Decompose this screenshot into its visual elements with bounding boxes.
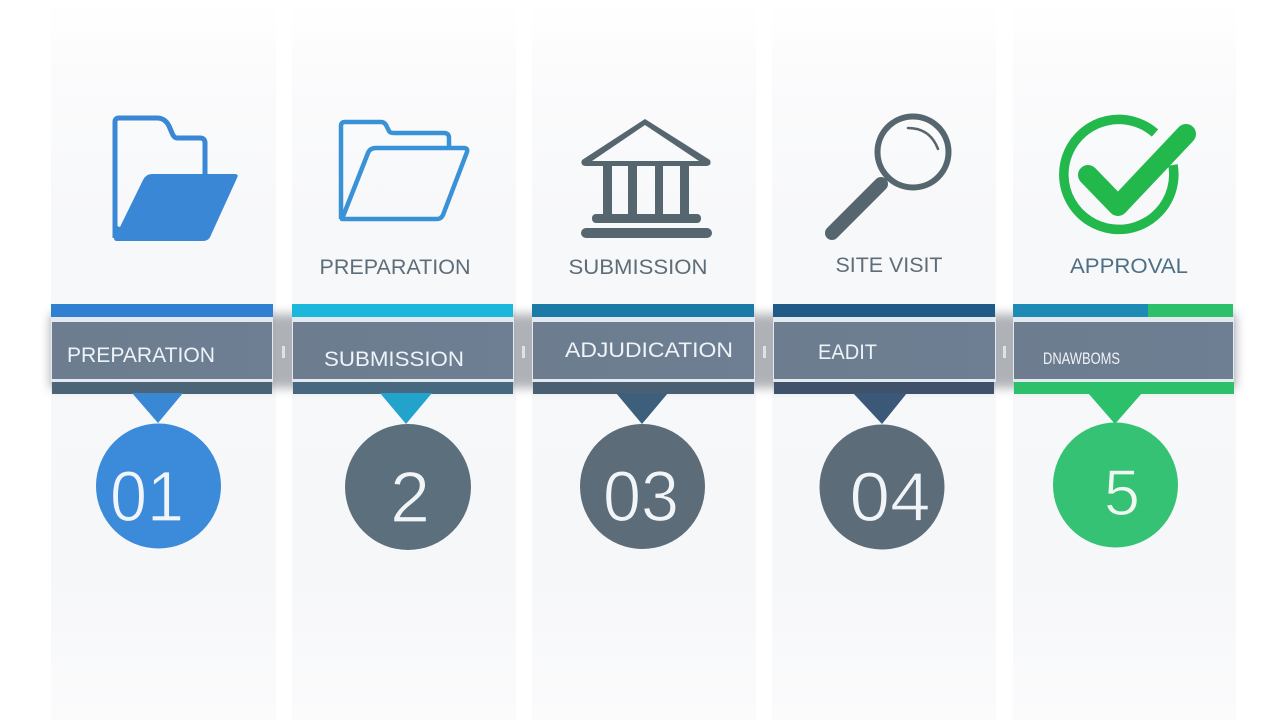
banner text: PREPARATION [67,344,215,367]
banner text: DNAWBOMS [1043,349,1120,368]
panel: step 4 banner [773,304,996,394]
step 5 number circle [1053,422,1178,548]
icon: magnifying glass [832,116,948,233]
panel: step 1 banner [51,304,273,394]
step 4 number circle: 04 [850,458,930,536]
step 2 number circle: 2 [390,458,430,538]
pointer: step 1 [132,393,183,423]
step 5 number circle: 5 [1104,456,1140,529]
step 4 number circle [820,424,944,550]
icon: open folder [341,122,467,219]
panel: step 3 banner [532,304,755,394]
step 2 number circle [345,424,471,550]
icon: institution building [581,119,712,238]
banner text: ADJUDICATION [565,339,733,362]
label: submission: SUBMISSION [568,256,708,279]
icon: filled folder [114,118,238,241]
banner text: SUBMISSION [324,348,464,371]
panel: step 5 banner [1013,304,1234,394]
step 1 number circle: 01 [110,458,184,537]
label: preparation: PREPARATION [320,256,470,279]
step 1 number circle [96,424,221,548]
banner text: EADIT [818,341,877,364]
pointer: step 4 [853,393,907,424]
step 3 number circle: 03 [603,458,679,537]
icon: green check [1064,119,1186,229]
panel: step 2 banner [292,304,514,394]
pointer: step 5 [1088,393,1142,424]
pointer: step 3 [616,393,668,424]
pointer: step 2 [380,393,432,424]
step 3 number circle [580,424,705,549]
label: site visit: SITE VISIT [836,254,943,277]
label: approval: APPROVAL [1070,255,1188,278]
